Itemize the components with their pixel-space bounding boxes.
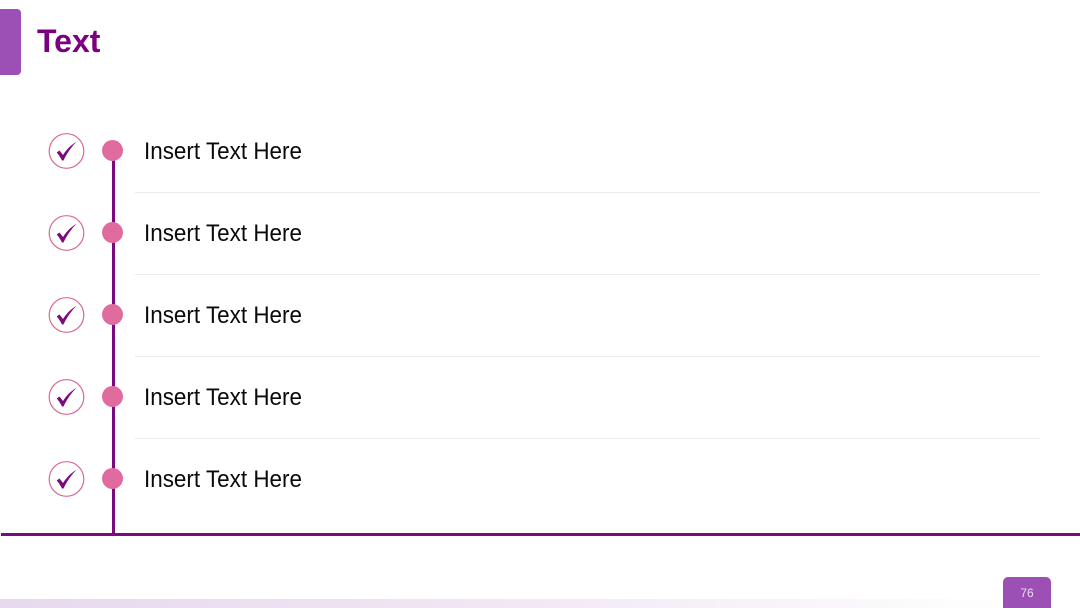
row 4 text: Insert Text Here bbox=[144, 384, 302, 411]
row 1 dot bbox=[102, 140, 123, 161]
row 3 bbox=[48, 297, 84, 333]
row 5 dot bbox=[102, 468, 123, 489]
page number badge bbox=[1003, 577, 1051, 608]
row 2 dot bbox=[102, 222, 123, 243]
row 2 text: Insert Text Here bbox=[144, 220, 302, 247]
row 1 text: Insert Text Here bbox=[144, 138, 302, 165]
row 3 dot bbox=[102, 304, 123, 325]
title: Text bbox=[37, 23, 100, 59]
timeline vertical line bbox=[112, 151, 115, 534]
icon: check circle bbox=[48, 461, 84, 497]
icon: check circle bbox=[48, 379, 84, 415]
row 1 bbox=[48, 133, 84, 169]
row 2 bbox=[48, 215, 84, 251]
baseline rule bbox=[1, 533, 1080, 536]
icon: check circle bbox=[48, 215, 84, 251]
footer gradient band bbox=[0, 599, 1080, 608]
row 5 text: Insert Text Here bbox=[144, 466, 302, 493]
page number badge: 76 bbox=[1020, 586, 1034, 600]
row 5 bbox=[48, 461, 84, 497]
row 4 bbox=[48, 379, 84, 415]
icon: check circle bbox=[48, 297, 84, 333]
row 4 dot bbox=[102, 386, 123, 407]
icon: check circle bbox=[48, 133, 84, 169]
title accent tab bbox=[0, 9, 21, 75]
row 3 text: Insert Text Here bbox=[144, 302, 302, 329]
